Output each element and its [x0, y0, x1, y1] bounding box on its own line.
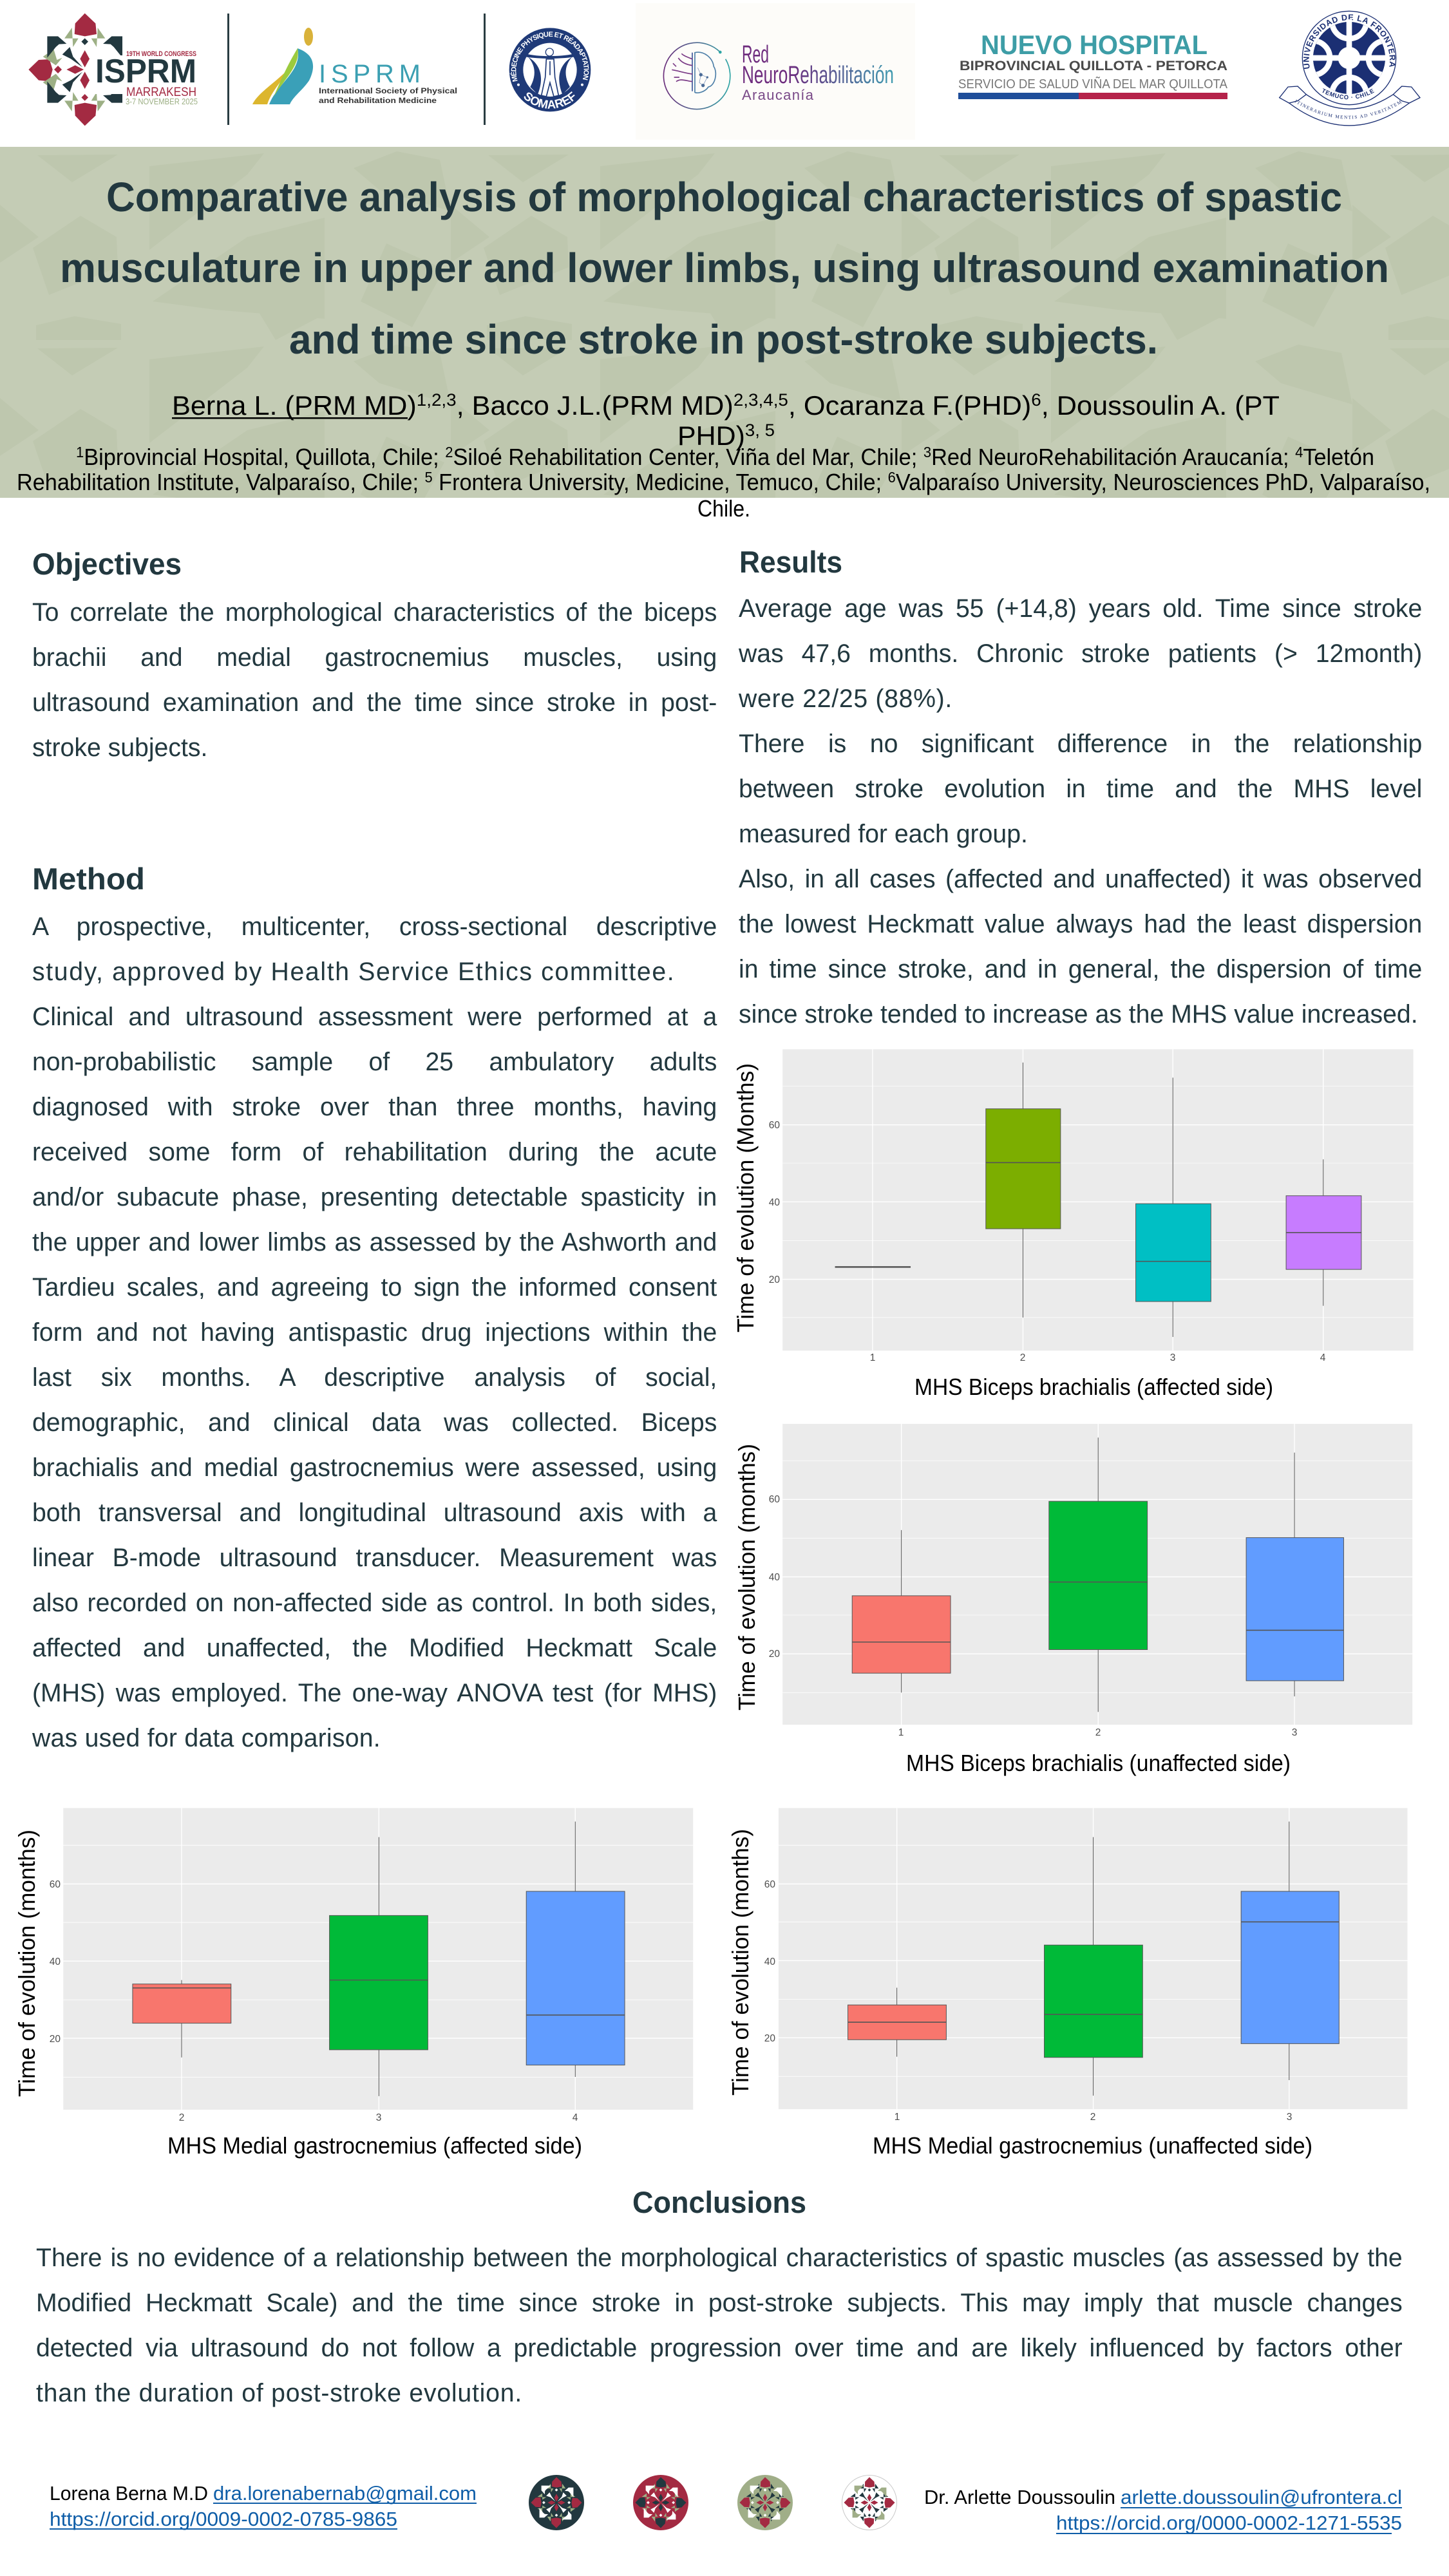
text block: method: study, approved by Health Service Ethics committee. [32, 958, 675, 986]
text block: method: was used for data comparison. [32, 1724, 381, 1752]
text block: conclusions: There is no evidence of a relationship between the morphological characteristics of spastic muscles (as assessed by the [36, 2244, 1403, 2272]
chart: MHS Biceps brachialis affected side: Time of evolution (Months) [732, 1063, 759, 1332]
text block: method: A prospective, multicenter, cross-sectional descriptive [32, 913, 717, 941]
chart: MHS Biceps brachialis unaffected side: 3 [1292, 1727, 1297, 1738]
authors: 3, 5 [745, 421, 775, 440]
chart: MHS Medial gastrocnemius unaffected side: 40 [764, 1956, 775, 1967]
affiliations [17, 444, 1430, 522]
chart: MHS Biceps brachialis affected side: 4 [1320, 1352, 1326, 1363]
logo: ISPRM 19th World Congress Marrakesh: 3-7 NOVEMBER 2025 [126, 97, 198, 106]
logo: SOMAREF: SOMAREF [524, 91, 575, 109]
affiliations: Valparaíso University, Neurosciences PhD, Valparaíso, [896, 469, 1430, 495]
footer contact: Lorena Berna [50, 2482, 477, 2530]
text block: method: Tardieu scales, and agreeing to sign the informed consent [32, 1273, 717, 1302]
box: MHS 4 [1286, 1159, 1361, 1306]
text block: results: were 22/25 (88%). [739, 685, 952, 713]
text block: conclusions: than the duration of post-stroke evolution. [36, 2379, 522, 2407]
heading: Method: Method [32, 862, 145, 896]
logo: ISPRM 19th World Congress Marrakesh: 19TH WORLD CONGRESS [126, 50, 196, 58]
chart: MHS Biceps brachialis affected side: MHS Biceps brachialis (affected side) [914, 1374, 1273, 1400]
affiliations: Biprovincial Hospital, Quillota, Chile; [84, 444, 445, 470]
authors: 6 [1031, 390, 1041, 410]
text block: results: between stroke evolution in time and the MHS level [739, 775, 1422, 803]
affiliations: 5 [424, 469, 433, 486]
text block: results: the lowest Heckmatt value always had the least dispersion [739, 910, 1422, 938]
footer contact: Arlette Doussoulin [924, 2486, 1402, 2534]
box: MHS 3 [1136, 1077, 1211, 1337]
box: MHS 2 [133, 1980, 231, 2058]
box: MHS 1 [848, 1987, 946, 2057]
heading: Conclusions: Conclusions [632, 2185, 806, 2219]
chart: MHS Medial gastrocnemius unaffected side: 1 [895, 2112, 900, 2123]
chart: MHS Medial gastrocnemius unaffected side: 20 [764, 2033, 775, 2044]
text block: results: in time since stroke, and in general, the dispersion of time [739, 955, 1422, 983]
logo: ISPRM society [252, 28, 457, 105]
text block: results: Average age was 55 (+14,8) years old. Time since stroke [739, 594, 1422, 623]
logo: SOMAREF: MÉDECINE PHYSIQUE ET RÉADAPTATION [510, 32, 589, 82]
text block: method: received some form of rehabilitation during the acute [32, 1138, 717, 1166]
footer contact: Lorena Berna: https://orcid.org/0009-0002-0785-9865 [50, 2508, 397, 2530]
affiliations: 6 [888, 469, 896, 486]
text block: results [739, 594, 1422, 1028]
affiliations: Rehabilitation Institute, Valparaíso, Chile; [17, 469, 439, 495]
text block: method: also recorded on non-affected side as control. In both sides, [32, 1589, 717, 1617]
logo: Nuevo Hospital Biprovincial [958, 30, 1228, 99]
text block: results: There is no significant difference in the relationship [739, 730, 1422, 758]
chart: MHS Biceps brachialis unaffected side: 2 [1095, 1727, 1101, 1738]
authors [172, 390, 1280, 451]
text block: conclusions: detected via ultrasound do not follow a predictable progression over time and are likely influenced by factors other [36, 2334, 1403, 2362]
chart: MHS Medial gastrocnemius affected side: 40 [50, 1956, 61, 1967]
chart: MHS Medial gastrocnemius affected side: 4 [573, 2112, 578, 2123]
heading: Results: Results [739, 545, 842, 579]
box: MHS 2 [1049, 1437, 1148, 1712]
chart: MHS Medial gastrocnemius affected side [14, 1808, 693, 2159]
logo: SOMAREF [509, 28, 591, 112]
text block: method: demographic, and clinical data was collected. Biceps [32, 1408, 717, 1437]
icon: red motif [633, 2475, 688, 2530]
text block: method: both transversal and longitudinal ultrasound axis with a [32, 1499, 717, 1527]
text block: method: Clinical and ultrasound assessment were performed at a [32, 1003, 717, 1031]
logo: Nuevo Hospital Biprovincial: SERVICIO DE SALUD VIÑA DEL MAR QUILLOTA [958, 76, 1228, 91]
text block: conclusions [36, 2244, 1403, 2407]
chart: MHS Medial gastrocnemius unaffected side: 60 [764, 1879, 775, 1890]
logo: Red NeuroRehabilitación Araucanía: Araucanía [742, 87, 814, 103]
heading: Objectives: Objectives [32, 547, 182, 581]
footer contact: Lorena Berna: dra.lorenabernab@gmail.com [213, 2482, 477, 2505]
text block: objectives: stroke subjects. [32, 734, 207, 762]
chart: MHS Medial gastrocnemius unaffected side: 2 [1090, 2112, 1095, 2123]
chart: MHS Medial gastrocnemius unaffected side: MHS Medial gastrocnemius (unaffected side) [873, 2132, 1312, 2159]
chart: MHS Biceps brachialis unaffected side [734, 1424, 1412, 1776]
text block: method: non-probabilistic sample of 25 ambulatory adults [32, 1048, 717, 1076]
footer contact: Arlette Doussoulin: Dr. Arlette Doussoulin [924, 2486, 1115, 2508]
chart: MHS Medial gastrocnemius affected side: Time of evolution (months) [14, 1830, 40, 2097]
chart: MHS Biceps brachialis unaffected side: MHS Biceps brachialis (unaffected side) [906, 1750, 1291, 1776]
affiliations: 1 [76, 444, 84, 460]
header logo row [28, 10, 1421, 126]
title: musculature in upper and lower limbs, using ultrasound examination [60, 245, 1389, 291]
text block: method: and/or subacute phase, presenting detectable spasticity in [32, 1183, 717, 1211]
box: MHS 3 [1241, 1822, 1339, 2080]
chart: MHS Biceps brachialis affected side: 1 [870, 1352, 875, 1363]
box: MHS 4 [526, 1822, 625, 2077]
chart: MHS Medial gastrocnemius unaffected side: Time of evolution (months) [727, 1829, 753, 2096]
affiliations: Frontera University, Medicine, Temuco, Chile; [433, 469, 888, 495]
title: Comparative analysis of morphological characteristics of spastic [106, 174, 1342, 220]
footer contact: Arlette Doussoulin: https://orcid.org/0000-0002-1271-5535 [1056, 2512, 1402, 2534]
logo: ISPRM society: International Society of Physical [319, 86, 457, 95]
text block: objectives: To correlate the morphological characteristics of the biceps [32, 598, 717, 627]
icon: white motif [842, 2476, 896, 2530]
affiliations: Chile. [697, 495, 750, 522]
chart: MHS Biceps brachialis unaffected side: 40 [769, 1572, 780, 1583]
logo: Nuevo Hospital Biprovincial: BIPROVINCIAL QUILLOTA - PETORCA [960, 59, 1227, 73]
text block: objectives: brachii and medial gastrocnemius muscles, using [32, 643, 717, 672]
box: MHS 2 [1045, 1837, 1142, 2096]
footer icons [529, 2475, 896, 2530]
authors: 2,3,4,5 [734, 390, 788, 410]
authors: , Ocaranza F.(PHD) [788, 390, 1031, 421]
chart: MHS Medial gastrocnemius affected side: 60 [50, 1879, 61, 1890]
chart: MHS Medial gastrocnemius affected side: MHS Medial gastrocnemius (affected side) [167, 2132, 582, 2159]
logo: ISPRM 19th World Congress Marrakesh: MARRAKESH [126, 86, 196, 99]
chart: MHS Biceps brachialis affected side: 2 [1020, 1352, 1025, 1363]
chart: MHS Biceps brachialis unaffected side: 1 [898, 1727, 904, 1738]
text block: results: since stroke tended to increase as the MHS value increased. [739, 1000, 1418, 1028]
box: MHS 2 [986, 1063, 1061, 1318]
chart: MHS Biceps brachialis unaffected side: 60 [769, 1494, 780, 1505]
chart: MHS Medial gastrocnemius affected side: 20 [50, 2034, 61, 2045]
logo: ISPRM society: and Rehabilitation Medicine [319, 96, 437, 105]
affiliations: Teletón [1303, 444, 1374, 470]
text block: method: brachialis and medial gastrocnemius were assessed, using [32, 1454, 717, 1482]
text block: method: linear B-mode ultrasound transducer. Measurement was [32, 1544, 717, 1572]
text block: results: Also, in all cases (affected and unaffected) it was observed [739, 865, 1422, 893]
logo: Red NeuroRehabilitación Araucanía: Red [742, 41, 769, 68]
icon: dark motif [529, 2475, 584, 2530]
text block: method: last six months. A descriptive analysis of social, [32, 1363, 717, 1392]
text block: method: diagnosed with stroke over than three months, having [32, 1093, 717, 1121]
footer contact: Lorena Berna: Lorena Berna M.D [50, 2482, 208, 2505]
title band background [0, 147, 1449, 498]
text block: method: the upper and lower limbs as assessed by the Ashworth and [32, 1228, 717, 1256]
affiliations: 2 [445, 444, 453, 460]
affiliations: Red NeuroRehabilitación Araucanía; [931, 444, 1295, 470]
chart: MHS Biceps brachialis affected side: 20 [769, 1274, 780, 1285]
chart: MHS Medial gastrocnemius affected side: 3 [376, 2112, 381, 2123]
logo: Universidad de La Frontera: TEMUCO · CHILE [1323, 88, 1374, 99]
chart: MHS Medial gastrocnemius affected side: 2 [179, 2112, 184, 2123]
authors: , Doussoulin A. (PT [1041, 390, 1280, 421]
logo: ISPRM 19th World Congress Marrakesh [28, 14, 200, 126]
authors: PHD) [677, 421, 744, 451]
affiliations: Siloé Rehabilitation Center, Viña del Mar, Chile; [453, 444, 923, 470]
authors: Berna L. (PRM MD) [172, 390, 410, 421]
affiliations: 3 [923, 444, 931, 460]
box: MHS 1 [835, 1266, 911, 1268]
text block: method: (MHS) was employed. The one-way ANOVA test (for MHS) [32, 1679, 717, 1707]
logo: Nuevo Hospital Biprovincial: NUEVO HOSPITAL [981, 30, 1208, 60]
text block: objectives [32, 598, 717, 762]
icon: sage motif [737, 2475, 793, 2530]
authors: , Bacco J.L.(PRM MD) [457, 390, 734, 421]
logo: ISPRM society: ISPRM [319, 60, 421, 88]
box: MHS 3 [1246, 1453, 1343, 1696]
chart: MHS Biceps brachialis affected side: 40 [769, 1197, 780, 1208]
text block: method [32, 913, 717, 1752]
footer contact: Arlette Doussoulin: arlette.doussoulin@ufrontera.cl [1121, 2486, 1402, 2508]
text block: method: form and not having antispastic drug injections within the [32, 1318, 717, 1347]
box: MHS 1 [852, 1530, 951, 1692]
affiliations: 4 [1295, 444, 1303, 460]
text block: results: was 47,6 months. Chronic stroke patients (> 12month) [739, 639, 1422, 668]
title [60, 174, 1389, 363]
logo: Red NeuroRehabilitación Araucanía [636, 3, 915, 140]
chart: MHS Biceps brachialis unaffected side: Time of evolution (months) [734, 1444, 760, 1710]
authors: 1,2,3 [417, 390, 457, 410]
chart: MHS Medial gastrocnemius unaffected side: 3 [1287, 2112, 1292, 2123]
box: MHS 3 [330, 1837, 428, 2096]
text block: objectives: ultrasound examination and the time since stroke in post- [32, 688, 717, 717]
logo: Red NeuroRehabilitación Araucanía: NeuroRehabilitación [742, 62, 894, 89]
logo: ISPRM 19th World Congress Marrakesh: ISPRM [95, 53, 196, 90]
text block: method: affected and unaffected, the Modified Heckmatt Scale [32, 1634, 717, 1662]
chart: MHS Biceps brachialis affected side [732, 1049, 1414, 1400]
title: and time since stroke in post-stroke subjects. [289, 316, 1158, 363]
logo: Universidad de La Frontera: ITINERARIUM MENTIS AD VERITATEM [1294, 99, 1401, 119]
text block: results: measured for each group. [739, 820, 1028, 848]
logo: Universidad de La Frontera [1279, 10, 1421, 126]
logo: Universidad de La Frontera: UNIVERSIDAD DE LA FRONTERA [1303, 14, 1395, 70]
chart: MHS Medial gastrocnemius unaffected side [727, 1808, 1407, 2159]
chart: MHS Biceps brachialis unaffected side: 20 [769, 1649, 780, 1660]
text block: conclusions: Modified Heckmatt Scale) and the time since stroke in post-stroke subjects. This may imply that muscle changes [36, 2289, 1403, 2317]
chart: MHS Biceps brachialis affected side: 3 [1170, 1352, 1175, 1363]
chart: MHS Biceps brachialis affected side: 60 [769, 1120, 780, 1131]
